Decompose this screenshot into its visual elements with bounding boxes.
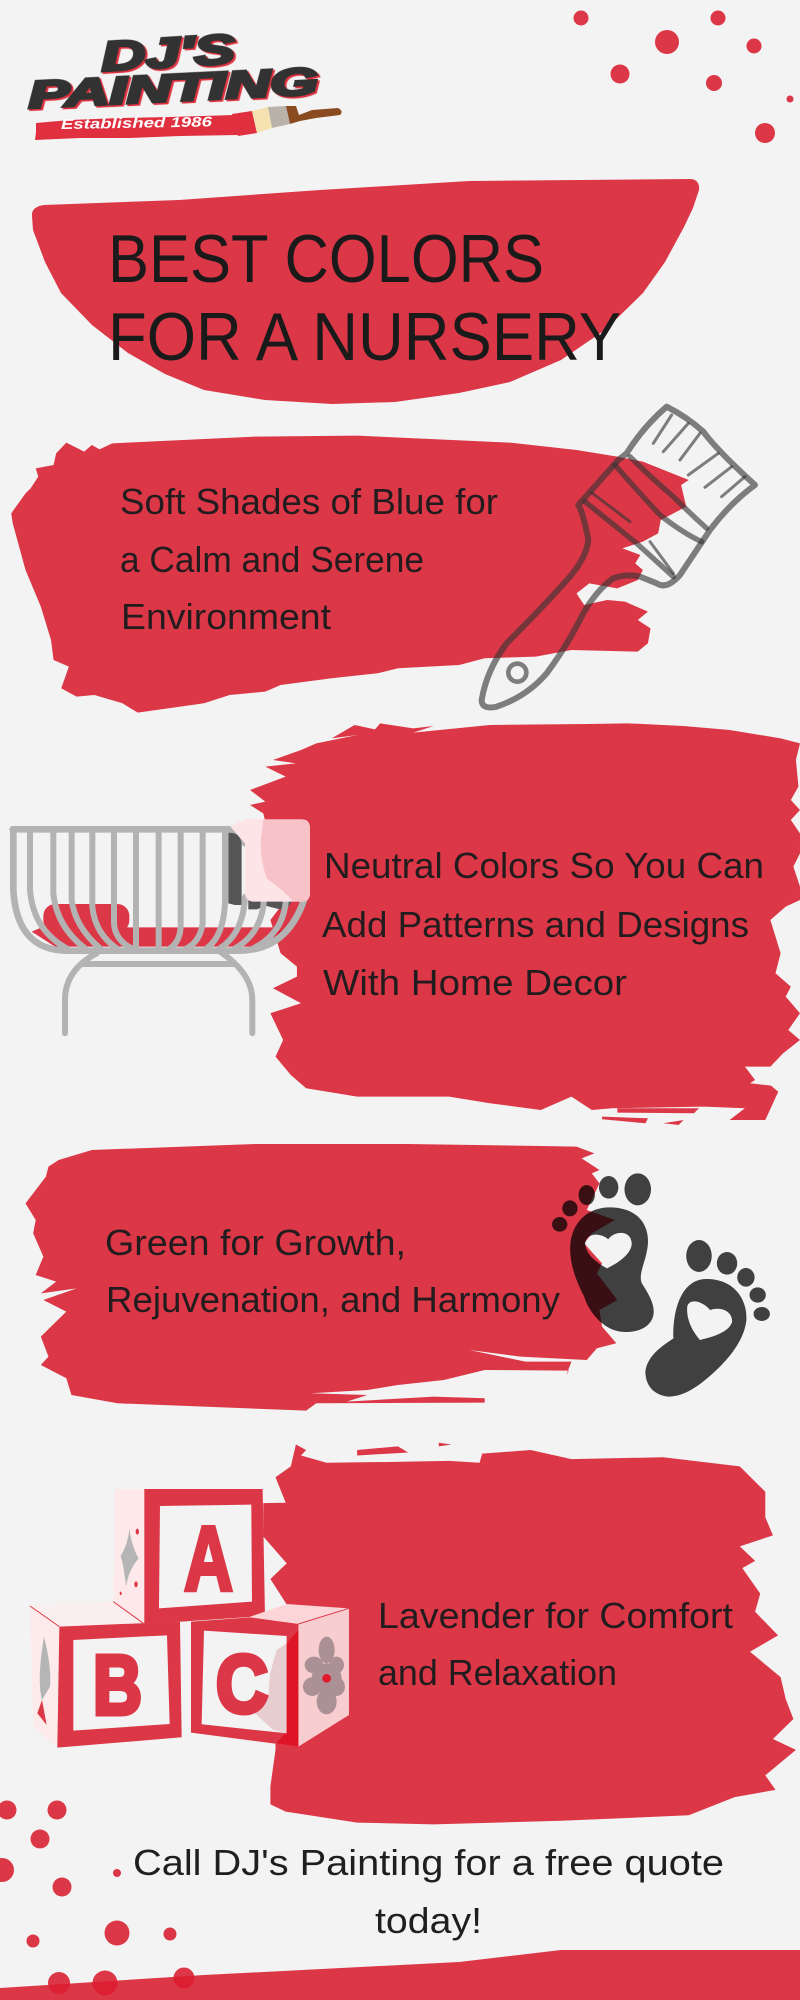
icon: baby footprints: [552, 1173, 770, 1397]
block B top and side: [30, 1602, 143, 1627]
block C frame: [191, 1617, 298, 1747]
logo text: Established 1986: Established 1986: [61, 113, 212, 132]
block A frame: [144, 1489, 265, 1623]
crib bars: [13, 829, 304, 1033]
paint stroke: [11, 436, 689, 713]
block B frame: [57, 1622, 182, 1748]
text: green: Rejuvenation, and Harmony: [106, 1279, 560, 1320]
crib dark post: [228, 833, 292, 909]
letter A: A: [184, 1508, 233, 1610]
crib pillow: [43, 904, 129, 932]
panel: neutral colors: [13, 723, 800, 1125]
panel: soft shades of blue: [11, 407, 755, 713]
call to action: [133, 1842, 724, 1941]
title text: BEST COLORS: [108, 221, 544, 297]
text: soft shades: Soft Shades of Blue for: [120, 481, 498, 522]
dot overlap with band: [48, 1976, 194, 1996]
logo paint stroke: [35, 115, 238, 140]
text: green: Green for Growth,: [105, 1222, 406, 1263]
title blob: [32, 179, 699, 404]
text: neutral colors: Add Patterns and Designs: [322, 904, 749, 945]
decorative dots: top right: [574, 10, 794, 143]
panel: lavender: [30, 1443, 796, 1824]
crib headboard: [230, 819, 310, 902]
text: neutral colors: Neutral Colors So You Can: [324, 845, 764, 886]
block C side and top: [248, 1604, 349, 1624]
paint stroke: [263, 1443, 796, 1824]
text: lavender: Lavender for Comfort: [378, 1595, 733, 1636]
call to action: Call DJ's Painting for a free quote: [133, 1842, 724, 1883]
logo text: DJ'S: DJ'S: [100, 25, 236, 80]
text: lavender: and Relaxation: [378, 1652, 617, 1693]
text: neutral colors: With Home Decor: [323, 962, 627, 1003]
paint stroke: [26, 1144, 617, 1411]
icon: alphabet blocks: [30, 1489, 349, 1748]
text: lavender: [378, 1595, 733, 1693]
crib mattress: [32, 927, 284, 947]
decorative dots: bottom left: [0, 1800, 194, 1996]
letter C: C: [216, 1639, 268, 1730]
text: green: [105, 1222, 560, 1320]
bottom band: [0, 1950, 800, 2000]
logo icon: brush: [232, 106, 342, 136]
logo text: PAINTING: PAINTING: [27, 61, 319, 117]
icon: paint brush: [482, 407, 755, 707]
title panel: [32, 179, 699, 404]
title panel: FOR A NURSERY: [108, 299, 621, 375]
text: neutral colors: [322, 845, 764, 1003]
text: soft shades: [120, 481, 498, 637]
text: soft shades: Environment: [121, 596, 331, 637]
icon: crib: [13, 819, 310, 1033]
call to action: today!: [375, 1900, 482, 1941]
panel: green: [26, 1144, 770, 1411]
letter B: B: [93, 1638, 142, 1732]
logo: DJ's Painting: [27, 25, 342, 140]
block A side: [113, 1489, 144, 1623]
text: soft shades: a Calm and Serene: [120, 539, 424, 580]
paint stroke: [250, 723, 800, 1125]
